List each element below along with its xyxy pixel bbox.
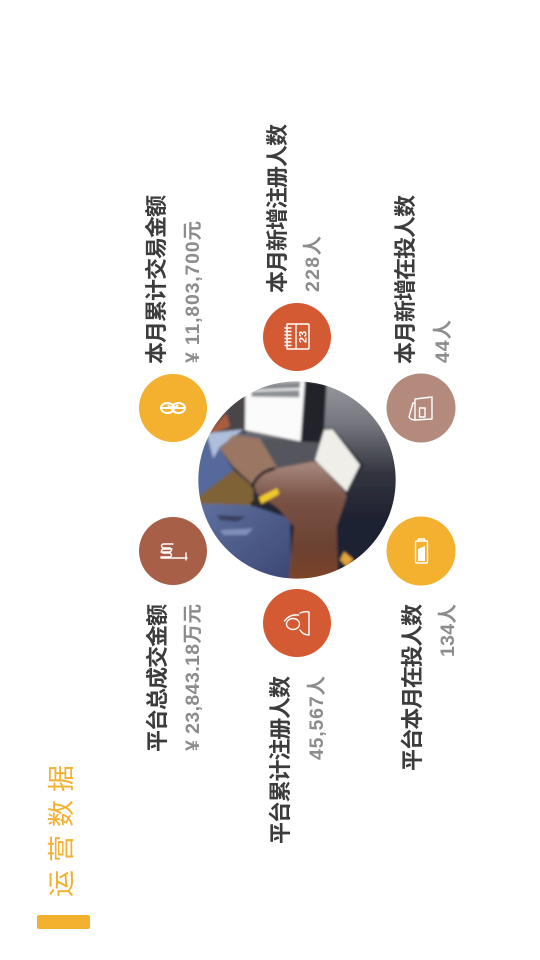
central photo: hand writing at desk	[198, 381, 396, 579]
label: 本月新增在投人数	[393, 195, 418, 364]
node: monthly active investors	[386, 516, 459, 771]
icon circle: red calendar	[263, 303, 331, 371]
infographic canvas	[37, 124, 456, 929]
icon circle: brown faucet	[139, 517, 207, 585]
value: 44人	[432, 320, 454, 363]
icon circle: rose document	[386, 374, 456, 442]
icon circle: red calendar: 23	[298, 331, 310, 343]
value: ¥ 23,843.18万元	[182, 604, 204, 751]
value: ¥ 11,803,700元	[182, 221, 204, 363]
title: 运营数据	[47, 765, 77, 897]
node: total platform turnover	[139, 517, 207, 752]
value: 228人	[302, 236, 324, 292]
value: 134人	[437, 604, 459, 657]
label: 平台本月在投人数	[400, 604, 425, 771]
label: 本月累计交易金额	[144, 195, 169, 364]
title accent bar	[37, 915, 90, 929]
icon circle: yellow interlocked loops	[139, 374, 207, 442]
label: 本月新增注册人数	[265, 124, 290, 293]
node: monthly new registrations	[263, 124, 331, 371]
label: 平台总成交金额	[145, 604, 170, 752]
node: total registrations	[263, 589, 331, 844]
label: 平台累计注册人数	[268, 676, 293, 844]
value: 45,567人	[306, 676, 328, 760]
icon circle: red users	[263, 589, 331, 657]
node: monthly transaction amount	[139, 195, 207, 442]
icon circle: yellow battery	[386, 516, 456, 586]
node: monthly new investors	[386, 195, 456, 442]
